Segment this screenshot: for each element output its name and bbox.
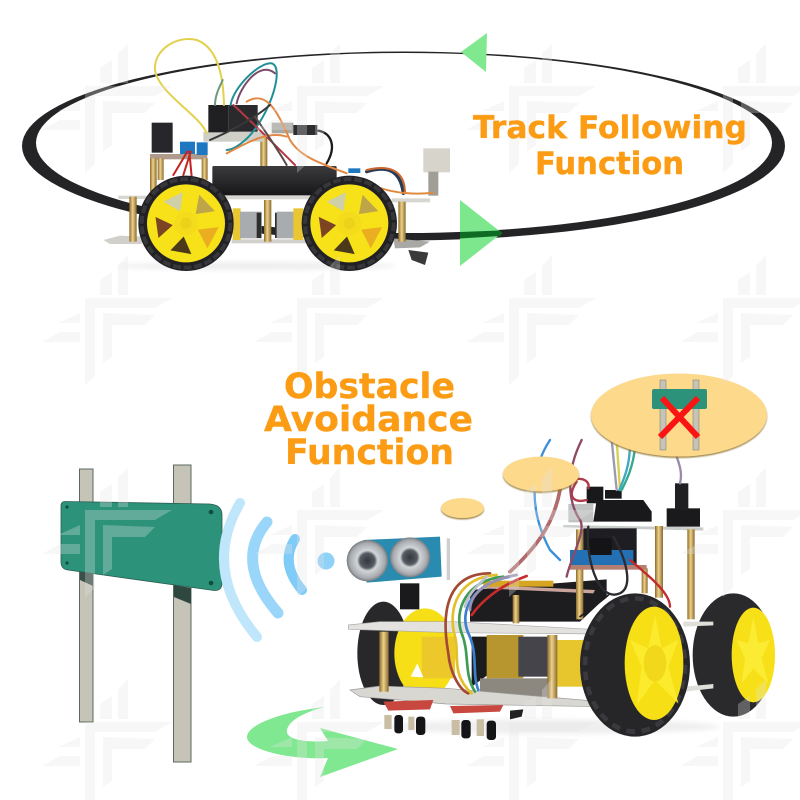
robot car: side view (103, 39, 450, 271)
far right wheel (693, 593, 775, 717)
arrow: track direction top (461, 33, 487, 72)
right wheel (302, 176, 397, 271)
gear motors (233, 208, 303, 240)
left wheel (138, 176, 234, 271)
near right wheel (580, 593, 690, 737)
rear left wheel (357, 602, 456, 705)
blue terminals (180, 142, 360, 173)
line tracking sensors (383, 700, 523, 740)
red cross (660, 398, 698, 437)
sign bolts (65, 505, 213, 585)
left post (80, 469, 93, 722)
brass posts (129, 137, 406, 242)
jumper wires (510, 440, 681, 617)
shadow (387, 719, 720, 734)
thought bubble large with blocked sign (591, 374, 767, 456)
heading: obstacle avoidance function: Obstacle (284, 367, 455, 407)
heading: obstacle avoidance function: Function (285, 433, 454, 473)
sensor signal waves (224, 503, 334, 637)
track ellipse (22, 51, 785, 240)
mini sign (660, 380, 666, 450)
thought bubble medium (503, 456, 579, 492)
post shadows (80, 570, 93, 586)
chassis plates (348, 525, 713, 707)
control board (203, 105, 317, 142)
heading: track following function: Function (535, 146, 684, 182)
arrow: track direction bottom (460, 200, 502, 266)
robot car: front view (347, 440, 775, 740)
heading: obstacle avoidance function: Avoidance (264, 400, 473, 440)
heading: track following function (473, 110, 747, 182)
brass posts (379, 526, 695, 698)
upper chassis plate (118, 154, 430, 202)
heading: obstacle avoidance function (264, 367, 473, 473)
heading: track following function: Track Following (473, 110, 747, 146)
ultrasonic sensor (347, 537, 450, 609)
rainbow wire bundle (446, 573, 527, 693)
ir sensor bracket (408, 148, 450, 265)
road sign obstacle (61, 465, 222, 762)
lower chassis plate (103, 236, 430, 248)
jumper wires (155, 39, 433, 194)
sign board (61, 502, 222, 591)
shadow (117, 262, 397, 270)
battery box and motor (470, 579, 607, 697)
driver board (568, 483, 700, 570)
battery box (212, 166, 337, 195)
relay block (152, 123, 173, 153)
curved green turn arrow (247, 707, 398, 777)
right post (174, 465, 191, 762)
yellow header (483, 581, 553, 587)
thought bubble small (441, 498, 484, 518)
